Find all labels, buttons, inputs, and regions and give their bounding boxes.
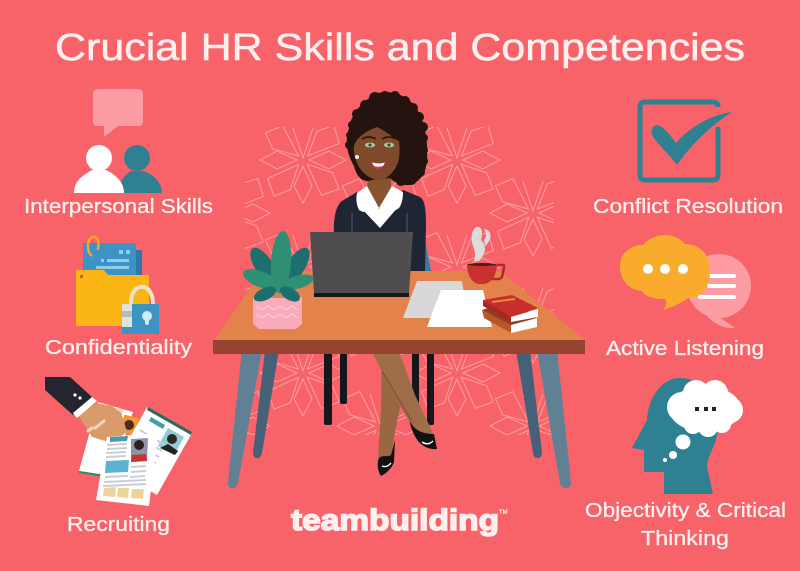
- chair legs: [324, 350, 434, 425]
- face: [354, 127, 400, 180]
- desk: [213, 271, 585, 354]
- jacket: [425, 240, 431, 271]
- collar: [356, 186, 379, 212]
- label: objectivity and critical thinking: Objectivity & Critical: [585, 500, 786, 522]
- person: upper body: [334, 91, 431, 271]
- eyes and brows: [362, 137, 396, 139]
- logo: teambuilding: teambuilding: [291, 504, 499, 537]
- earring: [355, 155, 359, 159]
- shirt: [362, 198, 398, 228]
- label: objectivity and critical thinking: [585, 500, 786, 550]
- icon: recruiting resumes and hand: [45, 377, 192, 506]
- icon: objectivity head with thought cloud: [632, 378, 743, 494]
- label: confidentiality: Confidentiality: [45, 337, 192, 359]
- icon: conflict resolution checkbox: [640, 102, 732, 180]
- plant: [240, 230, 315, 329]
- label: conflict resolution: Conflict Resolution: [593, 196, 783, 218]
- mouth: [371, 162, 386, 170]
- title: Crucial HR Skills and Competencies: [55, 27, 745, 69]
- icon: active listening speech bubbles: [620, 235, 751, 328]
- stacked books: [482, 295, 538, 333]
- laptop: [310, 232, 413, 297]
- steaming coffee cup: [467, 227, 504, 284]
- papers: [403, 281, 492, 327]
- label: interpersonal skills: Interpersonal Skills: [24, 196, 213, 218]
- label: recruiting: Recruiting: [67, 514, 170, 536]
- background flower pattern: [245, 127, 554, 435]
- neck: [367, 172, 391, 209]
- icon: confidentiality folder: [76, 237, 159, 334]
- label: active listening: Active Listening: [606, 338, 764, 360]
- desk legs: [228, 350, 571, 488]
- icon: interpersonal skills: [74, 89, 162, 193]
- person: legs and shoes: [373, 350, 437, 476]
- logo: teambuilding: TM: [499, 510, 508, 516]
- hair: [345, 91, 428, 186]
- label: objectivity and critical thinking: Thinking: [641, 528, 729, 550]
